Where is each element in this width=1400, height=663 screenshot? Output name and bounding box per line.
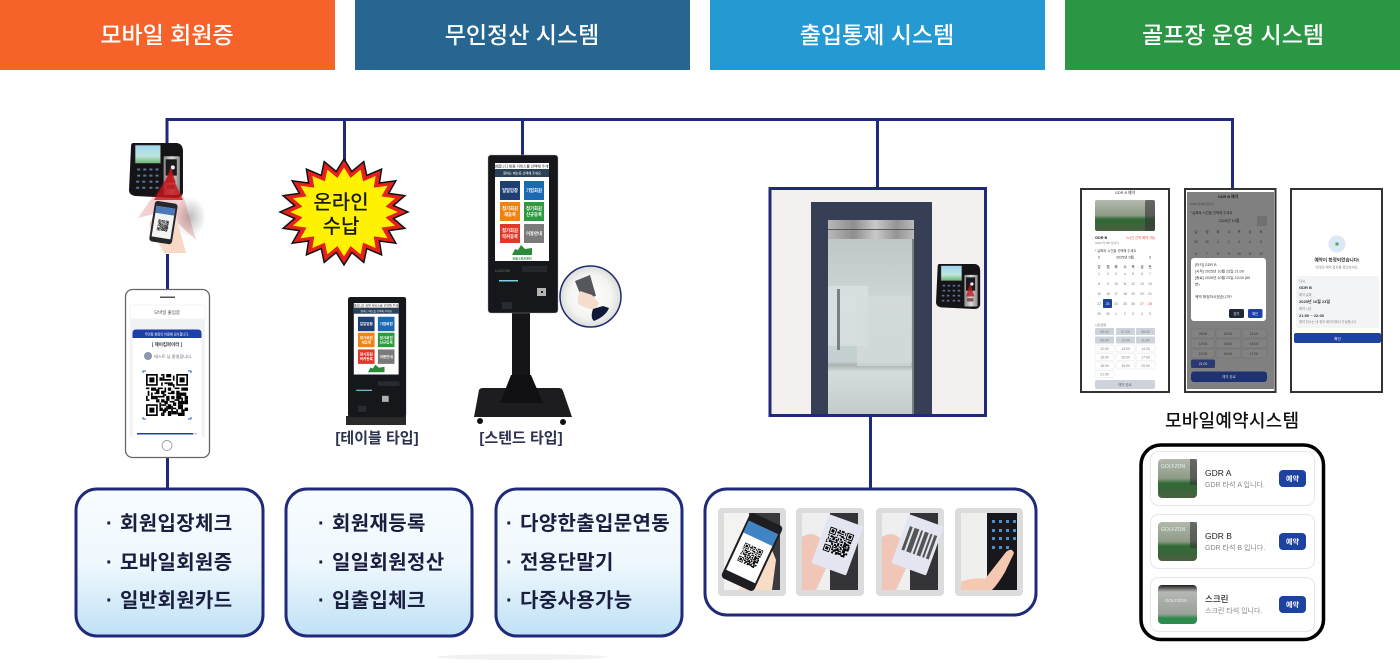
panel: mobile reservation screen 2: 예약 확정하시겠습니까? <box>1195 294 1232 299</box>
panel: mobile reservation screen 2: 7 <box>1206 252 1208 256</box>
panel: mobile reservation screen 1: 예약 완료 <box>1118 382 1132 387</box>
stand-type kiosk: 정기회원 <box>526 205 542 212</box>
table-type kiosk: 락커등록 <box>360 356 373 361</box>
panel: mobile reservation screen 1: 5 <box>1149 312 1151 316</box>
item: 스크린: GOLFZON <box>1165 598 1187 603</box>
item: GDR B <box>1150 514 1314 568</box>
panel: mobile reservation screen 1: 08:00 <box>1141 330 1150 334</box>
title: 모바일예약시스템: 모바일예약시스템 <box>1165 411 1299 431</box>
panel: mobile reservation screen 2: 2 <box>1228 240 1230 244</box>
text box: 모바일 회원증 기능: 일반회원카드 <box>120 589 232 612</box>
table-type kiosk: 신규등록 <box>380 340 393 344</box>
panel: mobile reservation screen 2: 09:00 <box>1199 332 1207 336</box>
mobile membership phone: [ 제이킴파이터 ] <box>152 341 183 348</box>
panel: mobile reservation screen 2: [종료] 2025년 10월 23일 22:00 (60 <box>1195 275 1250 280</box>
panel: mobile reservation screen 1: 금 <box>1140 265 1144 269</box>
text box: 무인정산 기능: 일일회원정산 <box>332 551 444 574</box>
panel: mobile reservation screen 1: 3 <box>1132 312 1134 316</box>
panel: mobile reservation screen 3: 예약이 확정되었습니다! <box>1314 256 1360 264</box>
text box: 모바일 회원증 기능: 모바일회원증 <box>120 551 232 574</box>
panel: mobile reservation screen 1: 24 <box>1114 302 1118 306</box>
header: 골프장 운영 시스템: 골프장 운영 시스템 <box>1142 22 1324 48</box>
item: 스크린: 스크린 타석 입니다. <box>1205 606 1262 615</box>
panel: mobile reservation screen 1: 09:00 <box>1100 338 1109 342</box>
text box: 무인정산 기능: 입출입체크 <box>332 589 426 612</box>
panel: mobile reservation screen 1: 07:00 <box>1121 330 1130 334</box>
table-type kiosk: 정기회원 <box>360 335 373 340</box>
panel: mobile reservation screen 1: 12:00 <box>1100 347 1109 351</box>
panel: mobile reservation screen 3 <box>1291 189 1382 392</box>
text box: 무인정산 기능 <box>286 489 472 636</box>
text box: 모바일 회원증 기능 <box>76 489 263 636</box>
starburst: 온라인 수납 <box>280 159 408 265</box>
panel: mobile reservation screen 2: GDR B 예약 <box>1218 194 1239 199</box>
tile: card barcode <box>876 508 944 596</box>
stand-type kiosk: 환영합니다 회원 서비스를 선택해 주세요. <box>491 164 553 168</box>
text box: 무인정산 기능: · <box>318 513 325 535</box>
panel: mobile reservation screen 1: ‹ <box>1098 255 1100 261</box>
panel: mobile reservation screen 2: 3 <box>1238 240 1240 244</box>
panel: mobile reservation screen 1: 목 <box>1131 264 1135 269</box>
panel: mobile reservation screen 2: 1 <box>1217 240 1219 244</box>
item: GDR A: GOLFZON <box>1161 464 1186 470</box>
panel: mobile reservation screen 2: 12 <box>1259 252 1263 256</box>
panel: mobile reservation screen 3: 2025년 10월 23일 <box>1299 298 1330 304</box>
panel: mobile reservation screen 1: 13:00 <box>1121 347 1130 351</box>
panel: mobile reservation screen 1: 화 <box>1114 264 1118 269</box>
panel: mobile reservation screen 1: 7 <box>1149 272 1151 276</box>
panel: glass door <box>770 188 986 416</box>
panel: mobile reservation screen 1: 8 <box>1098 282 1100 286</box>
panel: mobile reservation screen 1: 4 <box>1124 272 1126 276</box>
panel: mobile reservation screen 1: 17:00 <box>1141 356 1150 360</box>
panel: mobile reservation screen 1 <box>1081 189 1169 392</box>
item: GDR B: GDR B <box>1205 531 1232 541</box>
header: 골프장 운영 시스템 <box>1065 0 1400 70</box>
panel: mobile reservation screen 2: 닫기 <box>1234 311 1239 316</box>
panel: mobile reservation screen 1: 19 <box>1131 292 1135 296</box>
stand-type kiosk: 재등록 <box>504 211 516 218</box>
stand-type kiosk: 일일입장 <box>502 187 518 193</box>
header: 모바일 회원증 <box>0 0 335 70</box>
panel: mobile reservation screen 1: 9 <box>1107 282 1109 286</box>
panel: mobile reservation screen 1: 10 <box>1114 282 1118 286</box>
panel: mobile reservation screen 1: 18 <box>1123 292 1127 296</box>
header: 모바일 회원증: 모바일 회원증 <box>100 22 234 48</box>
table-type kiosk: 원하는 메뉴를 선택해 주세요 <box>361 309 393 313</box>
item: GDR A <box>1150 452 1314 506</box>
panel: mobile reservation screen 1: 2025년 9월 <box>1116 254 1134 260</box>
text box: 출입 기능: · <box>506 513 513 535</box>
panel: mobile reservation screen 2: 2025년 10월 <box>1219 218 1240 223</box>
panel: mobile reservation screen 1: 25 <box>1123 302 1127 306</box>
item: GDR A: GDR 타석 A 입니다. <box>1205 480 1265 489</box>
panel: mobile reservation screen 1: 10:00 <box>1121 338 1130 342</box>
panel: mobile reservation screen 2: 11 <box>1248 252 1252 256</box>
tile: keypad <box>955 508 1023 596</box>
panel: mobile reservation screen 1: 21 <box>1148 292 1152 296</box>
panel: mobile reservation screen 2: 11:00 <box>1250 332 1258 336</box>
panel: mobile reservation screen 2 <box>1185 189 1276 392</box>
panel: mobile reservation screen 3: 예약 날짜 <box>1299 292 1312 297</box>
panel: mobile reservation screen 2: 29 <box>1194 240 1198 244</box>
panel: mobile reservation screen 2: 10:00 <box>1224 332 1232 336</box>
text box: 무인정산 기능: 회원재등록 <box>332 512 426 535</box>
panel: mobile reservation screen 2: 수 <box>1227 229 1231 234</box>
panel: mobile reservation screen 1: 13 <box>1140 282 1144 286</box>
text box: 모바일 회원증 기능: · <box>106 590 113 612</box>
stand-type kiosk: 정기회원 <box>502 227 518 234</box>
text box: 출입 기능: 다중사용가능 <box>520 589 632 612</box>
item: GDR A: 예약 <box>1286 474 1299 483</box>
panel: mobile reservation screen 1: 11 <box>1123 282 1127 286</box>
table-type kiosk: 환영합니다 회원 서비스를 선택해 주세요. <box>351 303 402 308</box>
panel: mobile reservation screen 1: 15:00 <box>1100 356 1109 360</box>
connector lines <box>167 120 1232 489</box>
panel: mobile reservation screen 3: 확인 <box>1334 336 1341 341</box>
panel: mobile reservation screen 1: 27 <box>1140 302 1144 306</box>
table-type kiosk: 일일입장 <box>360 321 374 326</box>
panel: mobile reservation screen 2: 9 <box>1228 252 1230 256</box>
header: 출입통제 시스템 <box>710 0 1045 70</box>
panel: mobile reservation screen 1: GDR B <box>1095 236 1107 240</box>
item: GDR B: GDR 타석 B 입니다. <box>1205 543 1265 552</box>
panel: mobile reservation screen 1: 토 <box>1148 264 1152 269</box>
panel: reservation list <box>1141 445 1324 640</box>
stand-type kiosk: 원하는 메뉴를 선택해 주세요 <box>503 170 541 176</box>
panel: mobile reservation screen 3: 타석 <box>1299 278 1305 284</box>
panel: mobile reservation screen 1: 일 <box>1097 264 1101 269</box>
panel: mobile reservation screen 2: 6 <box>1195 252 1197 256</box>
panel: mobile reservation screen 2: 12:00 <box>1199 342 1207 346</box>
panel: mobile reservation screen 1: GDR 타석B 입니다 <box>1095 240 1119 245</box>
panel: mobile reservation screen 1: 5 <box>1132 272 1134 276</box>
item: 스크린: 예약 <box>1286 600 1299 609</box>
stand-type kiosk: 기업회원 <box>526 187 542 194</box>
panel: mobile reservation screen 2: 일 <box>1194 229 1198 234</box>
panel: mobile reservation screen 1: 16 <box>1106 292 1110 296</box>
stand-type kiosk <box>474 155 572 425</box>
panel: mobile reservation screen 1: 30 <box>1106 312 1110 316</box>
panel: mobile reservation screen 2: 금 <box>1248 230 1252 234</box>
panel: mobile reservation screen 2: 8 <box>1217 252 1219 256</box>
panel: mobile reservation screen 1: › <box>1149 255 1151 261</box>
panel: mobile reservation screen 1: 2 <box>1124 312 1126 316</box>
label: 스텐드 타입: [스텐드 타입] <box>479 430 563 447</box>
panel: mobile reservation screen 1: 11:00 <box>1141 338 1150 342</box>
panel: mobile reservation screen 1: 23 <box>1106 302 1109 306</box>
panel: mobile reservation screen 1: 21:00 <box>1100 372 1109 376</box>
stand-type kiosk: LUXCOM <box>495 269 510 273</box>
text box: 출입 기능: · <box>506 590 513 612</box>
mobile membership phone <box>126 290 210 458</box>
text box: 모바일 회원증 기능: · <box>106 552 113 574</box>
header: 무인정산 시스템: 무인정산 시스템 <box>445 22 599 48</box>
stand-type kiosk: 한울스포츠센터 <box>512 256 532 260</box>
panel: mobile reservation screen 1: 22 <box>1097 302 1101 306</box>
item: GDR A: GDR A <box>1205 468 1232 478</box>
panel: mobile reservation screen 2: 토 <box>1259 230 1263 234</box>
panel: mobile reservation screen 1: 16:00 <box>1121 356 1130 360</box>
item: GDR B: 예약 <box>1286 537 1299 546</box>
table-type kiosk: 이용안내 <box>380 354 393 359</box>
panel: mobile reservation screen 1: 26 <box>1131 302 1135 306</box>
item: GDR B: GOLFZON <box>1161 527 1186 533</box>
panel: mobile reservation screen 2: 14:00 <box>1250 342 1258 346</box>
panel: mobile reservation screen 2: 월 <box>1205 229 1209 234</box>
panel: mobile reservation screen 2: 17:00 <box>1250 352 1258 356</box>
starburst: 온라인 수납: 온라인 <box>313 191 369 214</box>
table-type kiosk: 기업회원 <box>380 321 393 326</box>
stand-type kiosk: 신규등록 <box>526 211 542 218</box>
panel: mobile reservation screen 1: 18:00 <box>1100 364 1109 368</box>
panel: mobile reservation screen 1: 06:00 <box>1100 330 1109 334</box>
panel: mobile reservation screen 1: * 날짜와 시간을 선택해 주세요 <box>1095 248 1136 253</box>
panel: mobile reservation screen 2: GDR 타석B 입니다 <box>1190 201 1214 206</box>
panel: mobile reservation screen 2: 13:00 <box>1224 342 1232 346</box>
item: 스크린: 스크린 <box>1205 594 1228 604</box>
panel: mobile reservation screen 1: 3 <box>1115 272 1117 276</box>
table-type kiosk: 재등록 <box>361 340 371 344</box>
table-type kiosk: 정기회원 <box>360 352 373 356</box>
table-type kiosk: 정기회원 <box>380 335 393 340</box>
panel: mobile reservation screen 1: 28 <box>1148 302 1152 306</box>
panel: mobile reservation screen 3: 예약 취소는 내 정보 페이지에서 가능합니다. <box>1299 319 1357 324</box>
panel: mobile reservation screen 3: 아래의 예약 정보를 확인하세요. <box>1315 264 1359 270</box>
icon: hand holding phone <box>560 266 621 327</box>
stand-type kiosk: 이용안내 <box>526 230 542 237</box>
panel: mobile reservation screen 2: [타석] GDR B <box>1195 262 1217 267</box>
panel: mobile reservation screen 1: 1 <box>1115 312 1117 316</box>
header: 무인정산 시스템 <box>355 0 690 70</box>
tile: phone QR <box>718 508 786 596</box>
label: 테이블 타입: [테이블 타입] <box>335 430 419 447</box>
panel: mobile reservation screen 2: 16:00 <box>1224 352 1232 356</box>
panel: mobile reservation screen 2: 화 <box>1216 229 1220 234</box>
panel: mobile reservation screen 1: 4 <box>1141 312 1143 316</box>
panel: mobile reservation screen 1: GDR B 예약 <box>1115 190 1136 195</box>
mobile membership phone: 테스트 님 환영합니다. <box>154 353 192 360</box>
panel: mobile reservation screen 2: 15:00 <box>1199 352 1207 356</box>
panel: mobile reservation screen 2: * 날짜와 시간을 선택해 주세요 <box>1190 210 1233 215</box>
panel: mobile reservation screen 2: 목 <box>1237 230 1241 234</box>
text box: 모바일 회원증 기능: 회원입장체크 <box>120 512 232 535</box>
panel: mobile reservation screen 1: 2 <box>1107 272 1109 276</box>
stand-type kiosk: 락커등록 <box>502 233 518 240</box>
header: 출입통제 시스템: 출입통제 시스템 <box>800 22 954 48</box>
panel: mobile reservation screen 2: 확인 <box>1252 311 1258 316</box>
panel: mobile reservation screen 1: 20:00 <box>1141 364 1150 368</box>
decorative soft shadow <box>437 654 607 660</box>
mobile membership phone: 무인정 회원의 이용해 감사합니다. <box>145 332 189 336</box>
panel: mobile reservation screen 2: 예약 완료 <box>1222 374 1236 379</box>
panel: mobile reservation screen 1: 20 <box>1140 292 1144 296</box>
panel: mobile reservation screen 3: 21:00 ~ 22:00 <box>1299 313 1325 318</box>
tile: card QR <box>796 508 864 596</box>
panel: mobile reservation screen 2: 21:00 <box>1199 362 1207 366</box>
panel: mobile reservation screen 2: 30 <box>1205 240 1209 244</box>
panel: mobile reservation screen 2: [시작] 2025년 10월 23일 21:00 <box>1195 268 1244 274</box>
text box: 출입 기능: · <box>506 552 513 574</box>
text box: 출입 기능: 다양한출입문연동 <box>520 512 670 535</box>
text box: 출입 기능: 전용단말기 <box>520 551 614 574</box>
panel: mobile reservation screen 2: 분) <box>1195 282 1200 286</box>
table-type kiosk <box>346 297 406 425</box>
stand-type kiosk: 정기회원 <box>502 205 518 212</box>
starburst: 온라인 수납: 수납 <box>323 215 359 238</box>
mobile membership phone: 모바일 출입증 <box>154 309 180 316</box>
panel: mobile reservation screen 1: 14 <box>1148 282 1152 286</box>
panel: mobile reservation screen 1: 29 <box>1097 312 1101 316</box>
panel: mobile reservation screen 1: 19:00 <box>1121 364 1130 368</box>
item: 스크린 <box>1150 578 1314 632</box>
text box: 무인정산 기능: · <box>318 552 325 574</box>
text box: 출입 기능 <box>496 489 682 636</box>
panel: mobile reservation screen 3: 예약 시간 <box>1299 306 1312 311</box>
text box: 모바일 회원증 기능: · <box>106 513 113 535</box>
panel: mobile reservation screen 2: 4 <box>1249 240 1251 244</box>
panel: mobile reservation screen 1: 6 <box>1141 272 1143 276</box>
panel: mobile reservation screen 3: GDR B <box>1299 285 1312 290</box>
panel: mobile reservation screen 1: 12 <box>1131 282 1135 286</box>
text box: 무인정산 기능: · <box>318 590 325 612</box>
icon: reader with mobile phone scan <box>129 143 206 253</box>
panel: mobile reservation screen 1: 시간선택 <box>1095 322 1106 327</box>
panel: mobile reservation screen 2: 5 <box>1260 240 1262 244</box>
panel: mobile reservation screen 1: 17 <box>1114 292 1118 296</box>
panel: mobile reservation screen 1: 월 <box>1106 264 1110 269</box>
panel: mobile reservation screen 1: 1시간 간격 예약 가능 <box>1126 235 1155 240</box>
panel: mobile reservation screen 1: 수 <box>1123 264 1127 269</box>
panel: access methods <box>705 489 1036 615</box>
panel: mobile reservation screen 1: 14:00 <box>1141 347 1150 351</box>
panel: mobile reservation screen 1: 1 <box>1098 272 1100 276</box>
panel: mobile reservation screen 2: 10 <box>1237 252 1241 256</box>
panel: mobile reservation screen 1: 15 <box>1097 292 1101 296</box>
